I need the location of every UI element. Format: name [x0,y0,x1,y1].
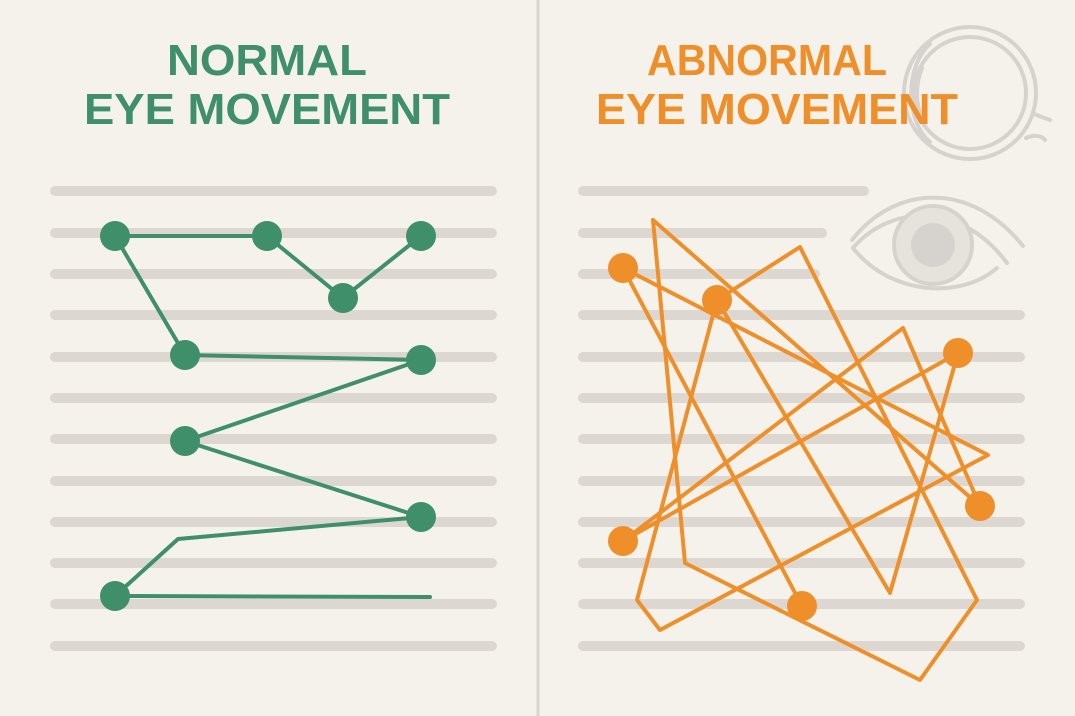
title: normal: NORMAL [167,36,367,85]
title: abnormal: EYE MOVEMENT [596,85,958,134]
title: normal [84,36,450,134]
panel: abnormal [583,36,1023,680]
text lines [583,191,1020,646]
panel: normal [55,36,492,646]
icon: eye cross-section [904,27,1050,159]
title: normal: EYE MOVEMENT [84,85,450,134]
scanpath: normal [115,236,430,597]
icon: eye [852,198,1023,288]
text lines [55,191,492,646]
title: abnormal: ABNORMAL [647,36,887,85]
scanpath: abnormal [623,220,988,680]
title: abnormal [596,36,958,134]
